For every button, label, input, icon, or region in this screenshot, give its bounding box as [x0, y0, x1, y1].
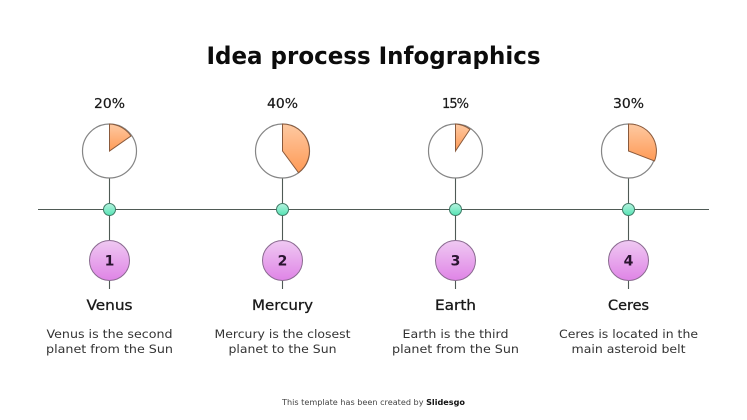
timeline dot 2: [276, 204, 288, 216]
description: Ceres: main asteroid belt: [572, 342, 686, 356]
description: Ceres: [559, 327, 698, 356]
number badge 4: [608, 240, 648, 280]
timeline dot 1: [104, 204, 116, 216]
pie chart: 40%: [256, 124, 310, 178]
heading: Venus: Venus: [86, 298, 132, 314]
credit line: This template has been created by Slidesgo: [281, 398, 465, 407]
percentage: 20%: 20%: [94, 97, 125, 112]
number badge 2: 2: [278, 254, 287, 270]
timeline axis: [38, 208, 709, 210]
description: Venus: planet from the Sun: [46, 342, 173, 356]
percentage: 15%: 15%: [442, 97, 469, 112]
description: Earth: Earth is the third: [402, 327, 508, 341]
heading: Earth: Earth: [435, 298, 476, 314]
title: Idea process Infographics: [206, 42, 540, 70]
pie chart: 30%: [602, 124, 656, 178]
description: Venus: [46, 327, 173, 356]
number badge 3: [436, 240, 476, 280]
description: Venus: Venus is the second: [46, 327, 172, 341]
number badge 1: [90, 240, 130, 280]
step 1: Venus: [46, 97, 173, 356]
number badge 2: [262, 240, 302, 280]
heading: Ceres: Ceres: [608, 298, 649, 314]
number badge 1: 1: [105, 254, 114, 270]
description: Mercury: planet to the Sun: [228, 342, 336, 356]
description: Earth: [392, 327, 519, 356]
step 4: Ceres: [559, 97, 698, 356]
description: Mercury: [214, 327, 351, 356]
description: Mercury: Mercury is the closest: [214, 327, 351, 341]
percentage: 40%: 40%: [267, 97, 298, 112]
number badge 4: 4: [624, 254, 634, 270]
pie chart: 15%: [428, 124, 482, 178]
step 2: Mercury: [214, 97, 351, 356]
timeline dot 4: [622, 204, 634, 216]
timeline dot 3: [450, 204, 462, 216]
description: Earth: planet from the Sun: [392, 342, 519, 356]
heading: Mercury: Mercury: [252, 298, 313, 314]
step 3: Earth: [392, 97, 519, 356]
number badge 3: 3: [451, 254, 460, 270]
pie chart: 20%: [82, 124, 136, 178]
description: Ceres: Ceres is located in the: [559, 327, 698, 341]
percentage: 30%: 30%: [613, 97, 644, 112]
